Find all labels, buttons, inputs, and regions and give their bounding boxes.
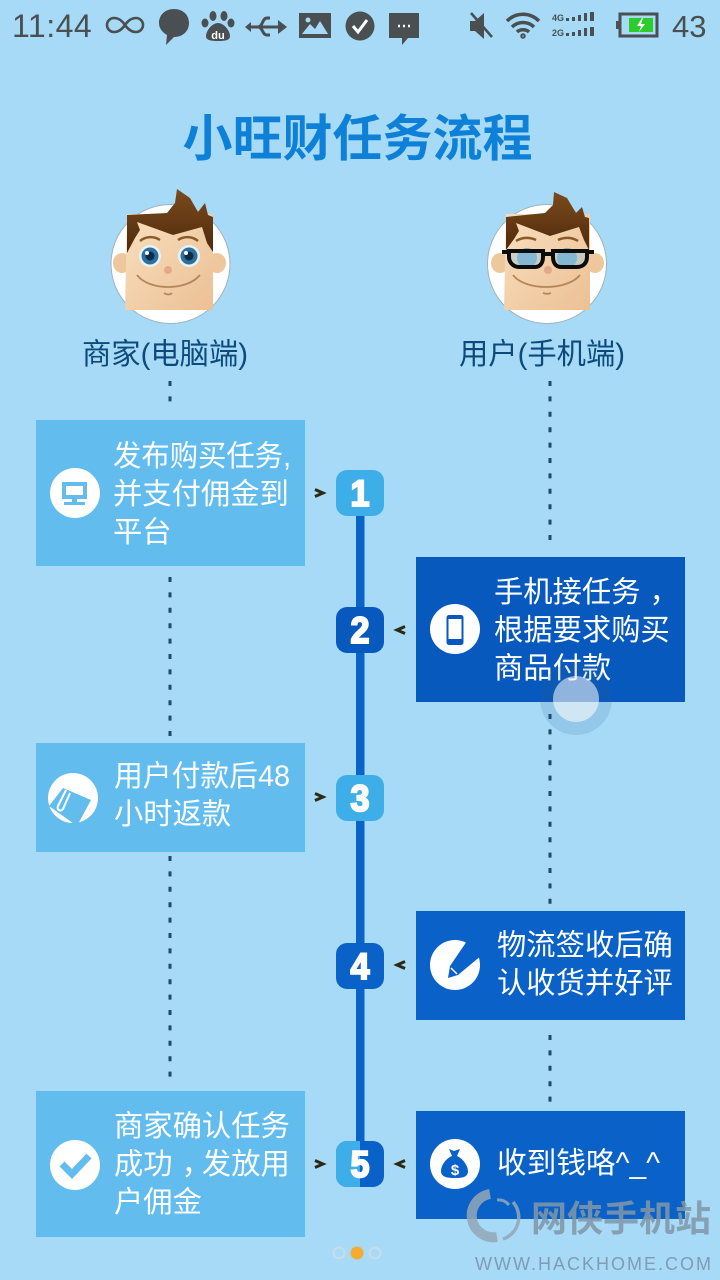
- icon: paper clip document: [48, 773, 98, 826]
- avatar: user with glasses: [488, 192, 606, 324]
- touch indicator: [540, 663, 612, 735]
- arrow: step 5 right: [397, 1160, 405, 1168]
- step badge 4: [336, 943, 384, 989]
- status icon: check circle: [346, 12, 374, 40]
- arrow: step 4: [397, 962, 405, 968]
- step 2 text: 根据要求购买: [494, 614, 670, 647]
- avatar: merchant: [111, 189, 230, 324]
- step 3 card: [36, 743, 305, 852]
- step 3 text line 2: 小时返款: [114, 798, 231, 831]
- battery level: 43: [672, 9, 706, 44]
- step badge 3: [336, 775, 384, 821]
- step badge 2: 2: [350, 610, 370, 651]
- title: 小旺财任务流程: [182, 111, 532, 167]
- arrow: step 5 left: [315, 1160, 323, 1168]
- step badge 3: 3: [350, 778, 370, 819]
- status icon: chat bubble: [159, 9, 189, 45]
- dotted line: user: [548, 381, 552, 1105]
- step 5 merchant text: [114, 1110, 290, 1219]
- label: merchant: 商家(电脑端): [82, 338, 248, 371]
- step 5 merchant text: 户佣金: [114, 1186, 202, 1219]
- status icon: baidu paw: du: [211, 30, 225, 42]
- step 5 user card: [416, 1111, 685, 1219]
- step 4 text: [497, 929, 673, 1000]
- watermark url: WWW.HACKHOME.COM: [475, 1254, 713, 1274]
- watermark name: 网侠手机站: [531, 1198, 711, 1239]
- timeline bar: [356, 495, 364, 1165]
- step badge 5: [336, 1141, 384, 1187]
- watermark logo: [472, 1194, 519, 1239]
- icon: money bag: $: [451, 1162, 460, 1179]
- step 5 merchant text: 商家确认任务: [114, 1110, 290, 1143]
- label: user: 用户(手机端): [459, 338, 625, 371]
- status icon: picture: [299, 13, 331, 38]
- step 1 text: 并支付佣金到: [113, 478, 289, 511]
- status icon: wifi: [507, 14, 539, 37]
- status icon: infinity: [107, 18, 143, 32]
- step 5 merchant card: [36, 1091, 305, 1237]
- step badge 5: 5: [350, 1144, 370, 1185]
- status icon: message: [389, 13, 419, 45]
- step 1 text: 平台: [113, 516, 172, 549]
- step 4 text: 认收货并好评: [497, 967, 673, 1000]
- step 2 text: 手机接任务 ，: [494, 576, 679, 609]
- status icon: usb: [249, 18, 281, 35]
- arrow: step 2: [397, 626, 405, 634]
- watermark: [472, 1194, 713, 1274]
- status icon: signal 4G 2G: [552, 12, 594, 38]
- arrow: step 1: [315, 490, 323, 496]
- step badge 1: [336, 470, 384, 516]
- status bar: [12, 8, 706, 45]
- clock: 11:44: [12, 8, 92, 44]
- step 5 user text: 收到钱咯^_^: [497, 1147, 660, 1180]
- step 1 text: [113, 440, 291, 549]
- step badge 4: 4: [350, 946, 370, 987]
- step 2 text: 商品付款: [494, 652, 611, 685]
- step 1 card: [36, 420, 305, 566]
- step 5 merchant text: 成功 ，发放用: [114, 1148, 290, 1181]
- step badge 2: [336, 607, 384, 653]
- step 4 card: [416, 911, 685, 1020]
- arrow: step 3: [315, 794, 323, 800]
- step 4 text: 物流签收后确: [497, 929, 673, 962]
- status icon: signal 4G 2G: 2G: [552, 28, 564, 38]
- step 3 text: 用户付款后48: [114, 760, 290, 793]
- icon: pen: [430, 940, 482, 990]
- icon: phone: [430, 604, 480, 654]
- status icon: battery: [616, 14, 657, 36]
- icon: computer: [50, 468, 100, 518]
- dotted line: merchant: [168, 381, 172, 1084]
- step 1 text: 发布购买任务,: [113, 440, 291, 473]
- icon: money bag: [430, 1139, 480, 1189]
- status icon: muted speaker: [470, 13, 492, 39]
- pagination dots: [334, 1246, 380, 1260]
- icon: check: [50, 1140, 100, 1190]
- step badge 1: 1: [350, 473, 370, 514]
- step 2 text: [494, 576, 679, 685]
- status icon: baidu paw: [202, 11, 234, 42]
- status icon: usb arrow: [245, 20, 287, 34]
- step 2 card: [416, 557, 685, 702]
- status icon: signal 4G 2G: 4G: [552, 13, 564, 23]
